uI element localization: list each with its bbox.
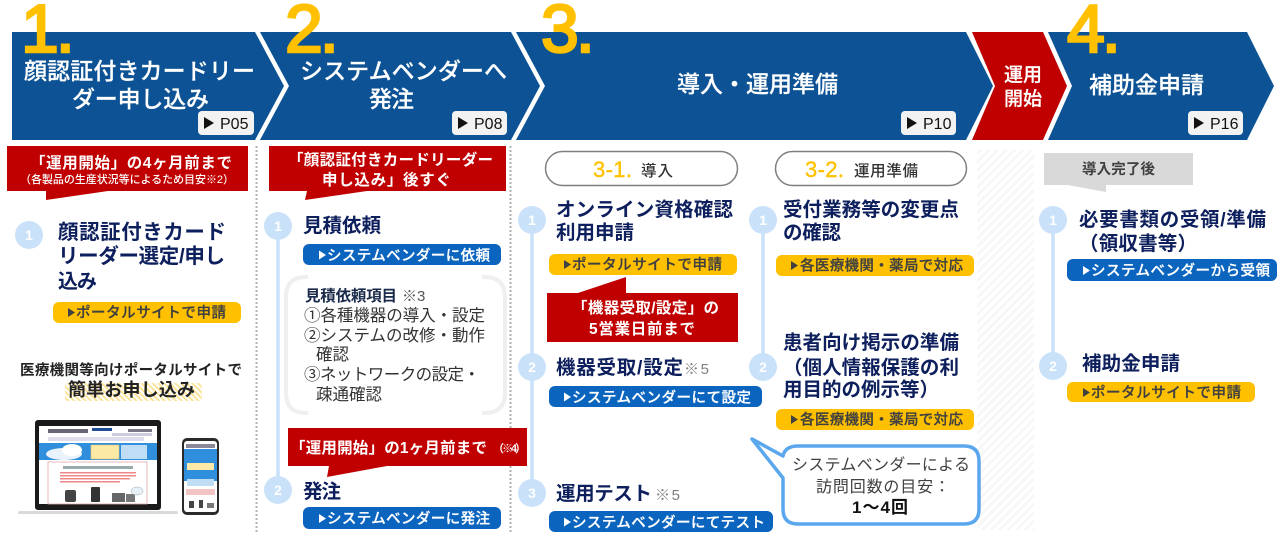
sub heading 3-2: 3-2. — [805, 157, 844, 182]
step marker 1: 1 — [528, 212, 536, 228]
item title: patient notice: 患者向け掲示の準備 — [783, 332, 959, 354]
arrow header: step 4 — [1048, 32, 1274, 140]
blue pill: request vendor — [303, 244, 501, 265]
step marker 2 — [749, 353, 777, 381]
yellow pill: portal — [1067, 382, 1255, 402]
sub heading 3-1 — [546, 152, 738, 186]
red callout: immediately after: 「顔認証付きカードリーダー — [288, 150, 493, 169]
item title: patient notice: （個人情報保護の利 — [783, 357, 959, 379]
red callout: immediately after: 申し込み」後すぐ — [322, 170, 451, 189]
step marker 2: 2 — [1049, 358, 1057, 374]
step marker 1: 1 — [274, 218, 282, 234]
step marker 1 — [518, 206, 546, 234]
page badge P10 — [901, 111, 956, 135]
yellow pill: portal: ポータルサイトで申請 — [1091, 384, 1241, 402]
arrow header: go-live: 運用 — [1004, 64, 1042, 86]
item title: documents: 必要書類の受領/準備 — [1079, 208, 1266, 231]
bracketed box: estimate items — [286, 277, 505, 413]
red callout: 4 months before — [7, 146, 248, 200]
red callout: immediately after — [269, 146, 506, 200]
arrow header: step 3: 導入・運用準備 — [677, 71, 838, 97]
red callout: 5 business days: 「機器受取/設定」の — [572, 298, 719, 317]
step marker 1 — [264, 212, 292, 240]
bracketed box: estimate items: 見積依頼項目 — [305, 287, 397, 305]
item title: online qualification: 利用申請 — [556, 222, 634, 244]
step marker 1: 1 — [25, 227, 33, 243]
portal heading: 簡単お申し込み — [68, 379, 195, 400]
blue pill: from vendor: システムベンダーから受領 — [1091, 262, 1270, 280]
item title: operation test: ※5 — [655, 487, 680, 504]
item title: order: 発注 — [303, 481, 341, 503]
item title: operation test: 運用テスト — [556, 483, 652, 505]
laptop illustration — [18, 420, 178, 514]
arrow header: go-live: 開始 — [1004, 88, 1042, 110]
arrow header: step 1: ダー申し込み — [72, 86, 209, 112]
panel: step 4 content — [1039, 153, 1277, 402]
yellow pill: facility handling: 各医療機関・薬局で対応 — [800, 410, 964, 428]
page badge P16: P16 — [1210, 116, 1239, 133]
item title: 顔認証付きカード — [58, 221, 226, 244]
blue pill: vendor test — [549, 511, 773, 532]
panel: step 2 content — [264, 146, 527, 529]
blue pill: from vendor — [1067, 259, 1277, 281]
yellow pill: portal: ポータルサイトで申請 — [76, 304, 226, 322]
yellow pill: facility handling: 各医療機関・薬局で対応 — [800, 256, 964, 274]
yellow pill: portal — [549, 254, 737, 275]
bracketed box: estimate items: 確認 — [316, 345, 350, 364]
step marker 2 — [518, 353, 546, 381]
step marker 2: 2 — [528, 359, 536, 375]
arrow header: step 2 — [260, 32, 540, 140]
bracketed box: estimate items: ③ネットワークの設定・ — [304, 365, 480, 384]
page badge P05: P05 — [220, 116, 249, 133]
step marker 2 — [1039, 352, 1067, 380]
item title: documents: （領収書等） — [1079, 232, 1197, 255]
sub heading 3-2 — [776, 152, 966, 186]
red callout: 5 business days: 5営業日前まで — [589, 319, 695, 338]
item title: documents — [1079, 208, 1266, 255]
sub heading 3-1: 導入 — [641, 162, 673, 180]
sub heading 3-1: 3-1. — [593, 157, 632, 182]
step marker 1: 1 — [759, 212, 767, 228]
item title: device setup: 機器受取/設定 — [556, 356, 683, 379]
yellow pill: portal: ポータルサイトで申請 — [572, 256, 722, 274]
portal heading: 医療機関等向けポータルサイトで — [20, 361, 242, 379]
speech bubble: visit count: 訪問回数の目安： — [816, 478, 950, 496]
panel: step 3-2 operation preparation — [749, 152, 979, 524]
yellow pill: portal — [53, 302, 241, 323]
panel: step 3-1 introduction — [518, 152, 773, 532]
step marker 1 — [1039, 206, 1067, 234]
arrow header: step 3 — [516, 32, 993, 140]
blue pill: vendor setup: システムベンダーにて設定 — [572, 388, 751, 406]
red callout: 4 months before: （各製品の生産状況等によるため目安※2） — [20, 172, 234, 186]
blue pill: order vendor — [303, 507, 501, 529]
bracketed box: estimate items: 疎通確認 — [316, 385, 382, 404]
hatched band: go-live column — [977, 150, 1034, 530]
step marker 2: 2 — [274, 482, 282, 498]
yellow pill: facility handling — [776, 409, 974, 430]
bracketed box: estimate items: ①各種機器の導入・設定 — [304, 306, 485, 325]
item title: reception changes: 受付業務等の変更点 — [783, 198, 959, 221]
item title: リーダー選定/申し — [58, 244, 225, 268]
red callout: 1 month before: 「運用開始」の1ヶ月前まで — [290, 438, 487, 457]
step marker 3: 3 — [528, 485, 536, 501]
speech bubble: visit count: 1〜4回 — [852, 498, 908, 517]
item title: patient notice: 用目的の例示等） — [783, 379, 939, 401]
sub heading 3-2: 運用準備 — [854, 162, 918, 180]
yellow pill: facility handling — [776, 255, 974, 276]
red callout: 1 month before — [288, 428, 527, 477]
page badge P10: P10 — [923, 116, 952, 133]
blue pill: request vendor: システムベンダーに依頼 — [327, 246, 490, 264]
item title: subsidy application: 補助金申請 — [1082, 353, 1180, 375]
smartphone illustration — [182, 438, 219, 515]
step marker 1 — [15, 221, 43, 249]
speech bubble: visit count — [752, 439, 979, 524]
item title — [58, 221, 226, 293]
arrow header: step 2: システムベンダーへ — [300, 58, 507, 84]
red callout: 1 month before: （※4） — [493, 442, 526, 455]
step marker 1 — [749, 206, 777, 234]
step marker 1: 1 — [1049, 212, 1057, 228]
item title: reception changes — [783, 198, 959, 244]
page badge P08 — [452, 111, 507, 135]
arrow header: step 1: 顔認証付きカードリー — [24, 58, 255, 84]
speech bubble: visit count: システムベンダーによる — [792, 456, 970, 474]
portal heading — [20, 361, 242, 401]
step marker 2: 2 — [759, 359, 767, 375]
blue pill: vendor test: システムベンダーにてテスト — [572, 514, 765, 532]
red callout: 4 months before: 「運用開始」の4ヶ月前まで — [30, 153, 232, 172]
item title: patient notice — [783, 332, 959, 401]
arrow header: step 1 — [12, 32, 284, 140]
red callout: 5 business days — [547, 277, 738, 342]
grey callout: after completion — [1044, 153, 1193, 192]
step marker 2 — [264, 476, 292, 504]
item title: online qualification: オンライン資格確認 — [556, 199, 733, 221]
item title: device setup: ※5 — [684, 361, 709, 378]
bracketed box: estimate items: ※3 — [402, 288, 425, 305]
page badge P05 — [198, 111, 254, 135]
arrow header: step 2: 発注 — [369, 86, 414, 112]
blue pill: vendor setup — [549, 386, 762, 407]
grey callout: after completion: 導入完了後 — [1082, 160, 1156, 178]
blue pill: order vendor: システムベンダーに発注 — [327, 510, 490, 528]
page badge P16 — [1188, 111, 1243, 135]
item title: online qualification — [556, 199, 733, 244]
step marker 3 — [518, 479, 546, 507]
page badge P08: P08 — [474, 116, 503, 133]
arrow header: go-live — [972, 32, 1067, 140]
panel: step 1 content — [7, 146, 248, 515]
item title: 込み — [58, 270, 97, 293]
item title: estimate request: 見積依頼 — [303, 215, 381, 237]
arrow header: step 4: 補助金申請 — [1089, 72, 1204, 98]
item title: reception changes: の確認 — [783, 222, 841, 244]
bracketed box: estimate items: ②システムの改修・動作 — [304, 326, 485, 345]
